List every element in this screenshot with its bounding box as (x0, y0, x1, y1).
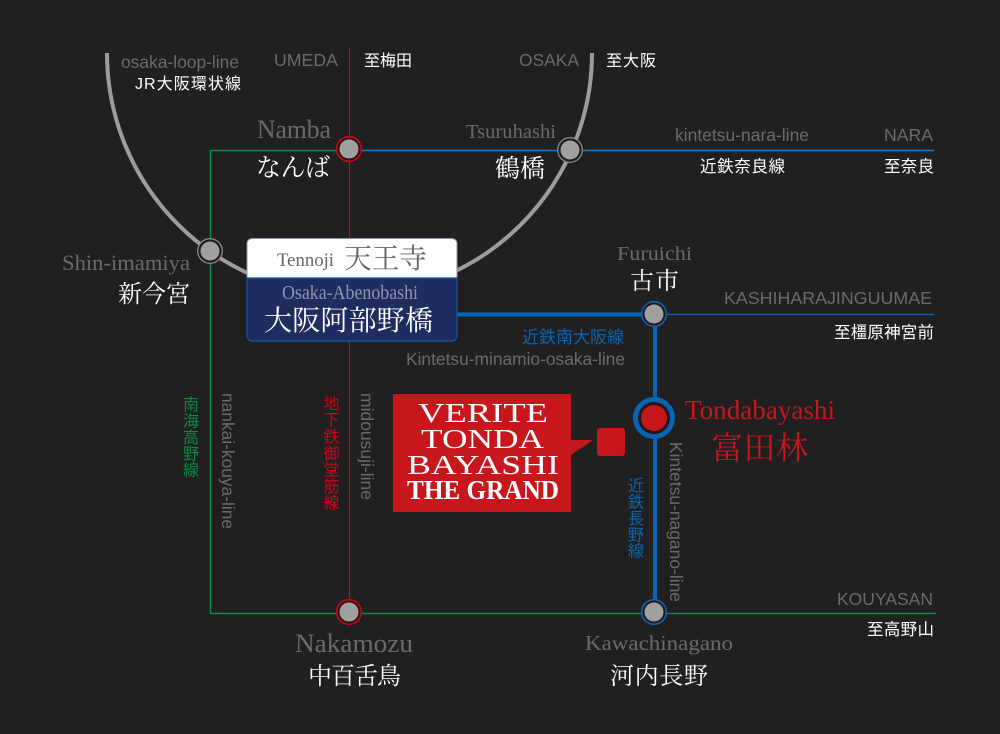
label: 大阪阿部野橋: 大阪阿部野橋 (264, 299, 433, 339)
label: 河内長野: 河内長野 (610, 656, 708, 691)
line: Koyasan branch (654, 612, 936, 614)
label: KOUYASAN: KOUYASAN (837, 589, 933, 609)
station: Nakamozu marker (337, 600, 361, 624)
line: Midosuji (348, 48, 350, 613)
label: 近鉄南大阪線: 近鉄南大阪線 (522, 328, 624, 347)
label: 至橿原神宮前: 至橿原神宮前 (834, 323, 934, 342)
station: Kawachinagano marker (642, 600, 666, 624)
label: Tondabayashi: Tondabayashi (685, 395, 835, 425)
station: Tondabayashi marker (636, 400, 672, 436)
line: Nankai Koya (210, 150, 654, 614)
callout line: TONDA: TONDA (421, 424, 545, 454)
label: 至大阪: 至大阪 (606, 52, 656, 70)
box: Osaka-Abenobashi (247, 278, 457, 341)
callout box (393, 394, 593, 512)
icon: property marker (597, 428, 625, 456)
label: KASHIHARAJINGUUMAE: KASHIHARAJINGUUMAE (724, 288, 932, 308)
station: Namba marker (337, 137, 361, 161)
label: Shin-imamiya: Shin-imamiya (62, 250, 190, 275)
label: 至梅田: 至梅田 (364, 52, 412, 70)
label: 近鉄奈良線: 近鉄奈良線 (700, 157, 786, 176)
label: 中百舌鳥: 中百舌鳥 (308, 656, 401, 691)
label: なんば: なんば (256, 148, 330, 184)
label: 至奈良: 至奈良 (884, 157, 934, 176)
line: Kintetsu Nara (349, 150, 934, 152)
panel: Tennoji / Osaka-Abenobashi station box (247, 237, 457, 341)
label: 鶴橋: 鶴橋 (495, 149, 545, 185)
label: Kawachinagano: Kawachinagano (585, 631, 733, 655)
label: Namba: Namba (257, 115, 331, 144)
label: 至高野山: 至高野山 (867, 620, 934, 639)
line: Kashiharajingumae branch (654, 314, 934, 316)
label: Furuichi: Furuichi (617, 243, 692, 265)
label: OSAKA: OSAKA (519, 50, 579, 70)
label: Kintetsu-minamio-osaka-line: Kintetsu-minamio-osaka-line (406, 349, 625, 369)
label: NARA: NARA (884, 125, 933, 145)
label: 南海高野線: 南海高野線 (179, 396, 203, 478)
station: Furuichi marker (642, 302, 666, 326)
label: 富田林: 富田林 (711, 423, 808, 469)
label: 天王寺: 天王寺 (344, 237, 427, 277)
station: Shin-imamiya marker (198, 239, 222, 263)
label: nankai-kouya-line: nankai-kouya-line (218, 393, 238, 529)
callout line: VERITE: VERITE (418, 398, 548, 428)
label: Osaka-Abenobashi: Osaka-Abenobashi (282, 282, 418, 304)
line: Kintetsu Nagano (653, 314, 657, 613)
box: Tennoji (247, 238, 457, 278)
label: Tsuruhashi: Tsuruhashi (466, 121, 556, 143)
label: JR大阪環状線: JR大阪環状線 (135, 75, 241, 93)
callout: VERITE TONDA BAYASHI THE GRAND (393, 394, 593, 512)
station: Tsuruhashi marker (558, 138, 582, 162)
label: 新今宮: 新今宮 (118, 274, 190, 309)
label: Nakamozu: Nakamozu (295, 629, 413, 658)
label: 地下鉄御堂筋線: 地下鉄御堂筋線 (320, 395, 344, 511)
line: JR Osaka loop (107, 53, 592, 296)
label: midousuji-line: midousuji-line (357, 393, 377, 500)
callout line: BAYASHI: BAYASHI (407, 450, 559, 480)
line: Kintetsu Minami-Osaka (457, 312, 654, 316)
label: osaka-loop-line: osaka-loop-line (121, 52, 239, 72)
label: 古市: 古市 (630, 261, 679, 296)
label: 近鉄長野線: 近鉄長野線 (624, 477, 648, 559)
callout line: THE GRAND: THE GRAND (407, 475, 559, 505)
label: UMEDA: UMEDA (274, 50, 338, 70)
label: Kintetsu-nagano-line: Kintetsu-nagano-line (666, 442, 686, 602)
label: kintetsu-nara-line: kintetsu-nara-line (675, 125, 809, 145)
label: Tennoji: Tennoji (277, 250, 334, 271)
